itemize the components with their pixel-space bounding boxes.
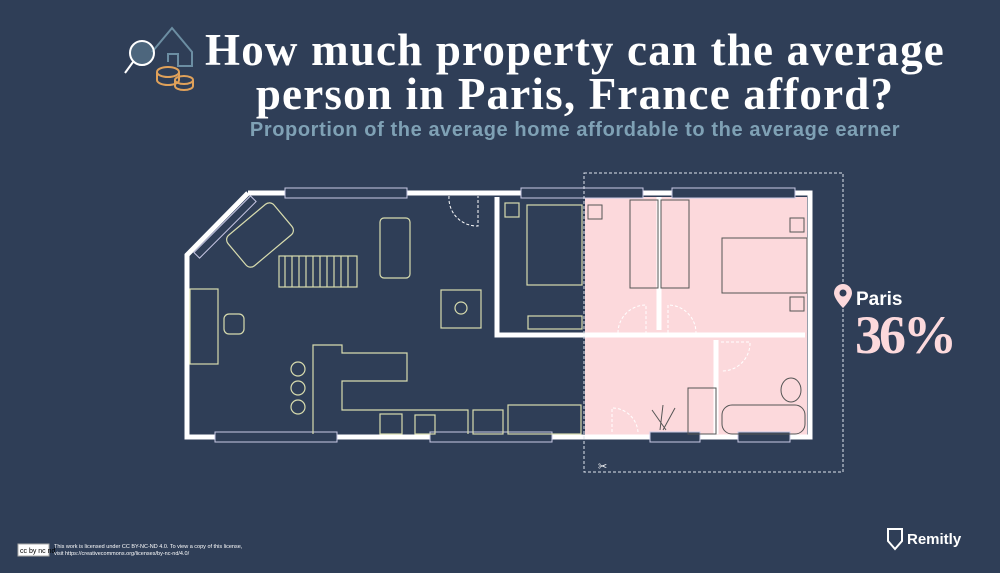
subtitle: Proportion of the average home affordable to the average earner: [250, 119, 900, 141]
icon: scissors: ✂: [598, 461, 607, 473]
icon: house search: [125, 28, 193, 90]
title: How much property can the average: [205, 25, 945, 75]
door: [449, 196, 478, 226]
title: [205, 25, 945, 119]
windows: [194, 188, 795, 442]
license text: This work is licensed under CC BY-NC-ND 4.0. To view a copy of this license,: [54, 544, 243, 550]
license badge: cc by nc nd: [20, 548, 56, 555]
furniture pink: [588, 200, 807, 434]
label: Paris: Paris: [856, 289, 902, 310]
text: visit https://creativecommons.org/licenses/by-nc-nd/4.0/: [54, 551, 190, 557]
logo: Remitly: Remitly: [907, 531, 962, 548]
stat: 36%: 36%: [855, 305, 954, 365]
logo: Remitly: [888, 529, 962, 549]
walls: [187, 193, 810, 437]
furniture living: [190, 200, 582, 434]
dashed selection box: [584, 173, 843, 472]
floor plan: [187, 188, 810, 442]
title: person in Paris, France afford?: [256, 69, 894, 119]
pink affordable area: [585, 197, 807, 435]
icon: location pin: [834, 284, 852, 308]
license badge: [18, 544, 56, 556]
